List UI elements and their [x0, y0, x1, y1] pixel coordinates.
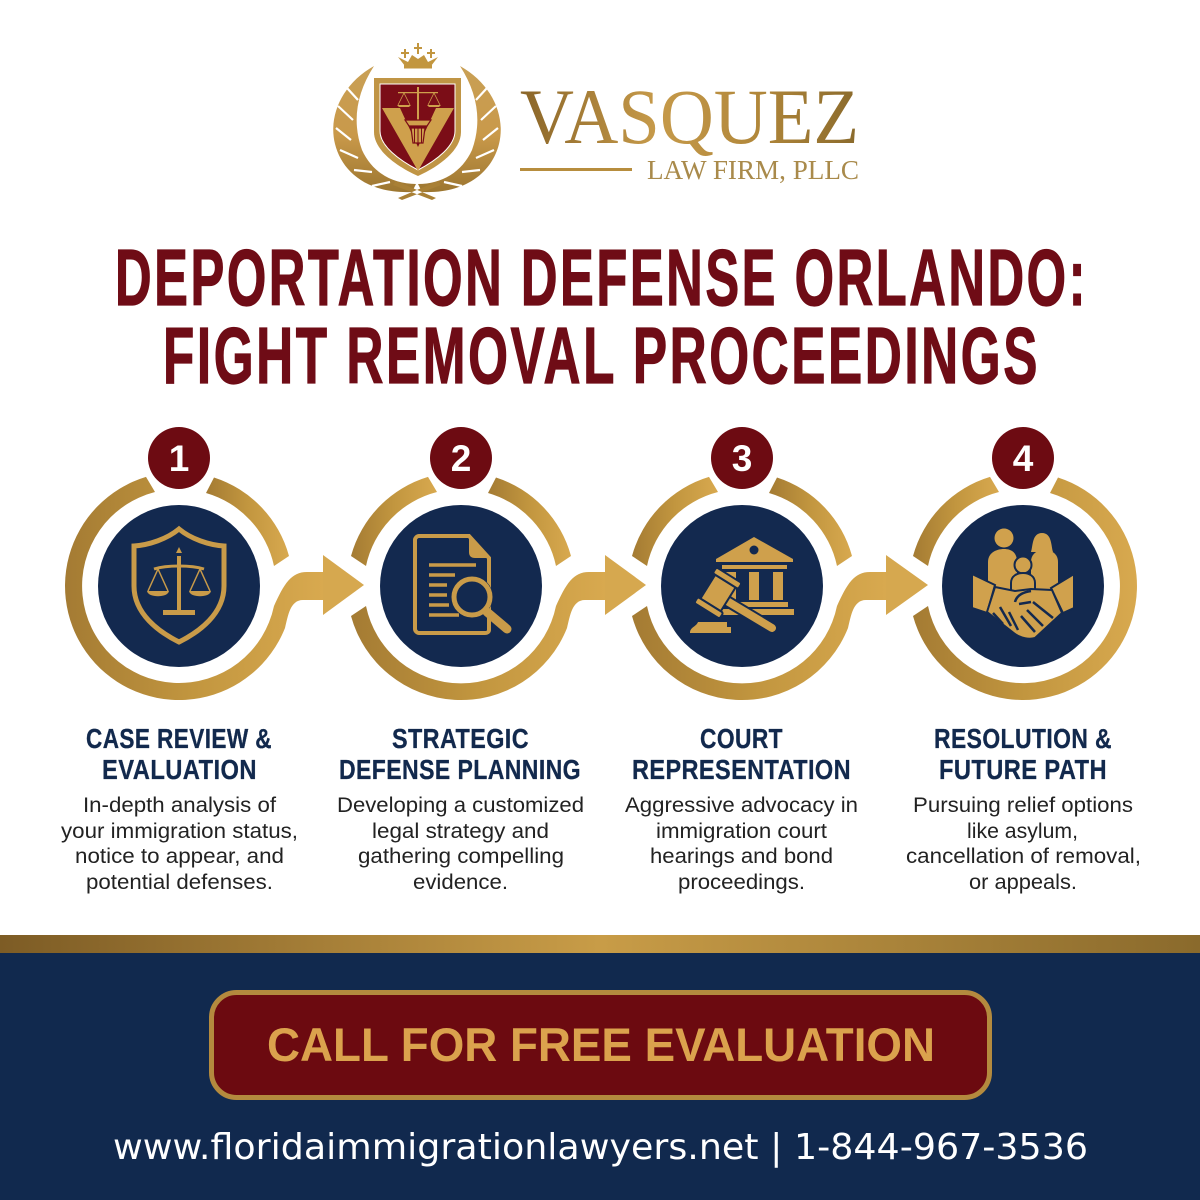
step 2 heading	[339, 723, 581, 785]
gold band	[0, 935, 1200, 953]
step 1 description: your immigration status,	[61, 820, 298, 843]
step 4 description: cancellation of removal,	[906, 845, 1141, 868]
step 3 description: Aggressive advocacy in	[625, 794, 858, 817]
badge 4	[992, 427, 1054, 489]
step 2 description: evidence.	[413, 871, 508, 894]
title	[115, 233, 1088, 400]
step 4 description: Pursuing relief options	[913, 794, 1133, 817]
step 3 description	[625, 794, 858, 894]
step 3 description: immigration court	[656, 820, 827, 843]
step 3 ring and arrow	[632, 477, 928, 700]
icon: laurel wreath	[333, 66, 501, 200]
step 1 description: In-depth analysis of	[83, 794, 276, 817]
step 1	[61, 427, 364, 894]
icon: family and handshake	[942, 505, 1104, 667]
step 1 heading: CASE REVIEW &	[86, 723, 272, 754]
step 4 description	[906, 794, 1141, 894]
logo subtitle: LAW FIRM, PLLC	[647, 155, 859, 185]
badge 3: 3	[732, 438, 752, 479]
logo	[333, 43, 859, 200]
step 1 description	[61, 794, 298, 894]
logo wordmark: VASQUEZ	[520, 73, 859, 160]
step 1 heading: EVALUATION	[102, 754, 257, 785]
step 3 heading: REPRESENTATION	[632, 754, 851, 785]
step 2 description: gathering compelling	[358, 845, 564, 868]
icon: document with magnifier	[380, 505, 542, 667]
step 1 heading	[86, 723, 272, 785]
step 2 heading: STRATEGIC	[392, 723, 529, 754]
step 3	[625, 427, 928, 894]
navy footer background	[0, 953, 1200, 1200]
step 4 heading	[934, 723, 1112, 785]
icon: shield crest	[374, 78, 461, 176]
badge 4: 4	[1013, 438, 1034, 479]
badge 2	[430, 427, 492, 489]
badge 1: 1	[169, 438, 189, 479]
step 2 ring and arrow	[351, 477, 646, 700]
step 3 heading	[632, 723, 851, 785]
step 4 description: like asylum,	[967, 820, 1078, 843]
step 4 heading: RESOLUTION &	[934, 723, 1112, 754]
step 4	[906, 427, 1141, 894]
step 1 description: notice to appear, and	[75, 845, 284, 868]
step 2 description: legal strategy and	[372, 820, 549, 843]
step 3 description: hearings and bond	[650, 845, 833, 868]
step 1 description: potential defenses.	[86, 871, 273, 894]
badge 3	[711, 427, 773, 489]
badge 1	[148, 427, 210, 489]
logo rule	[520, 168, 632, 171]
call to action button	[212, 992, 990, 1098]
icon: courthouse and gavel	[661, 505, 823, 667]
step 2 description: Developing a customized	[337, 794, 584, 817]
step 4 heading: FUTURE PATH	[939, 754, 1107, 785]
step 2 heading: DEFENSE PLANNING	[339, 754, 581, 785]
website and phone: www.floridaimmigrationlawyers.net | 1-844-967-3536	[113, 1127, 1088, 1168]
step 3 description: proceedings.	[678, 871, 805, 894]
step 1 ring and arrow	[65, 477, 364, 700]
step 4 ring	[913, 477, 1137, 700]
call to action button: CALL FOR FREE EVALUATION	[267, 1018, 935, 1071]
step 2	[337, 427, 646, 894]
icon: shield with scales	[98, 505, 260, 667]
icon: crown	[398, 43, 438, 68]
footer panel	[0, 935, 1200, 1200]
step 4 description: or appeals.	[969, 871, 1077, 894]
step 2 description	[337, 794, 584, 894]
step 3 heading: COURT	[700, 723, 783, 754]
badge 2: 2	[451, 438, 471, 479]
